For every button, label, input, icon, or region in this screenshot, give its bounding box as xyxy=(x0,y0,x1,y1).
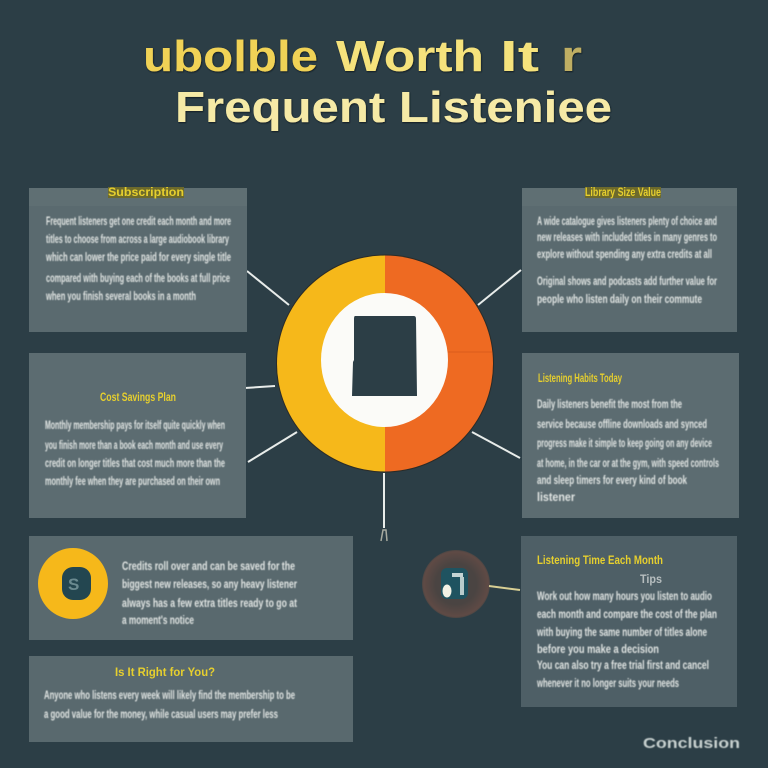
title: r xyxy=(561,32,582,81)
connector lines xyxy=(245,270,521,541)
panel: middle right xyxy=(522,353,739,518)
panel: lower right xyxy=(521,536,737,707)
panel: top left xyxy=(29,187,247,332)
panel: top right: people who listen daily on their commute xyxy=(537,294,702,306)
panel: lower left with icon: biggest new releases, so any heavy listener xyxy=(122,579,297,591)
heading: Listening Time Each Month xyxy=(537,555,663,567)
title: It xyxy=(500,32,539,81)
icon: headphones circle xyxy=(422,550,490,618)
panel: middle left: Monthly membership pays for itself quite quickly when xyxy=(45,420,225,432)
panel: top left: compared with buying each of the books at full price xyxy=(46,273,230,285)
panel: top left: Frequent listeners get one credit each month and more xyxy=(46,216,231,228)
panel: lower left with icon xyxy=(29,536,353,640)
panel: lower right: You can also try a free trial first and cancel xyxy=(537,660,709,672)
panel: top left: which can lower the price paid for every single title xyxy=(45,252,231,264)
icon: yellow circle: S xyxy=(68,575,79,594)
icon: yellow circle xyxy=(38,548,108,619)
footer label: Conclusion xyxy=(643,735,740,752)
heading: Listening Habits Today xyxy=(538,373,622,385)
panel: bottom left: Anyone who listens every week will likely find the membership to be xyxy=(44,690,295,702)
panel: top left: when you finish several books in a month xyxy=(45,291,196,303)
panel: middle left: credit on longer titles that cost much more than the xyxy=(45,458,225,470)
heading: Library Size Value xyxy=(585,187,661,199)
panel: top right xyxy=(522,187,737,332)
panel: middle left xyxy=(29,353,246,518)
title: Frequent Listeniee xyxy=(175,83,612,132)
connector: headphones to panel xyxy=(489,586,520,590)
panel: middle right: Daily listeners benefit the most from the xyxy=(537,399,682,411)
heading: Is It Right for You? xyxy=(115,667,215,679)
panel: middle left: monthly fee when they are purchased on their own xyxy=(45,476,220,488)
panel: top left: titles to choose from across a large audiobook library xyxy=(46,234,229,246)
panel: middle right: and sleep timers for every kind of book xyxy=(537,475,687,487)
panel: middle right: listener xyxy=(537,492,575,504)
panel: lower right: Tips xyxy=(640,574,662,586)
panel: lower left with icon: Credits roll over and can be saved for the xyxy=(122,561,295,573)
panel: lower right: whenever it no longer suits your needs xyxy=(536,678,679,690)
panel: lower right: before you make a decision xyxy=(537,644,659,656)
heading: Cost Savings Plan xyxy=(100,392,176,404)
panel: bottom left xyxy=(29,656,353,742)
panel: lower left with icon: always has a few extra titles ready to go at xyxy=(122,598,297,610)
title xyxy=(143,32,612,132)
panel: lower left with icon: a moment's notice xyxy=(122,615,194,627)
panel: bottom left: a good value for the money, while casual users may prefer less xyxy=(44,709,278,721)
center donut chart xyxy=(276,254,494,472)
title: ubolble xyxy=(143,32,318,81)
title: Worth xyxy=(336,32,484,81)
panel: middle left: you finish more than a book each month and use every xyxy=(45,440,223,452)
icon: dark book xyxy=(352,316,417,396)
heading: Subscription xyxy=(108,187,184,199)
